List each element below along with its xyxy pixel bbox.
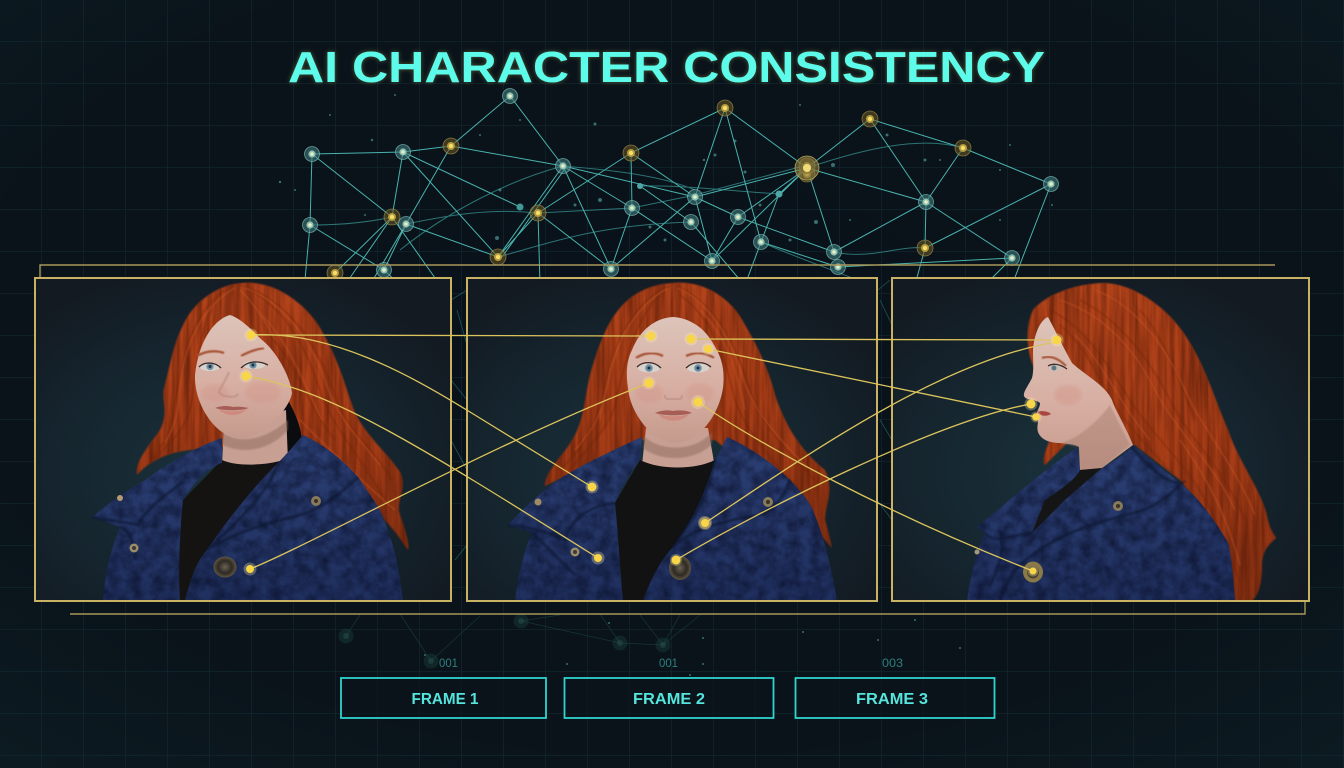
frame 1 border	[35, 278, 451, 601]
hair, frame 1	[137, 283, 408, 550]
coat folds and buttons, frame 2	[508, 460, 790, 580]
title: AI CHARACTER CONSISTENCY	[288, 43, 1045, 92]
face and neck, frame 1	[195, 315, 302, 478]
hair, frame 2	[545, 283, 832, 548]
tracking point markers	[240, 328, 1064, 576]
frame 2 sequence number: 001	[659, 656, 678, 670]
black sweater, frame 1	[179, 460, 280, 600]
navy coat, frame 3	[967, 445, 1235, 601]
frame 2 label button: FRAME 2	[633, 691, 705, 708]
outer offset gold frame lines	[40, 265, 1305, 614]
face and neck, frame 2	[627, 317, 724, 478]
navy coat, frame 2	[508, 437, 837, 601]
frame 3 label button	[796, 678, 994, 718]
panel: frame 1 portrait	[35, 278, 451, 601]
navy coat, frame 1	[93, 435, 403, 601]
frame 1 label button	[341, 678, 546, 718]
frame 2 border	[467, 278, 877, 601]
frame 3 sequence number: 003	[882, 656, 903, 670]
frame 2 label button	[564, 678, 774, 718]
tracking connector lines	[246, 335, 1057, 571]
coat folds and buttons, frame 1	[93, 463, 358, 578]
frame 1 label button: FRAME 1	[412, 691, 479, 708]
neural network graph	[279, 88, 1058, 676]
panel: frame 3 profile portrait	[892, 278, 1309, 601]
black sweater, frame 2	[615, 460, 720, 601]
hair, frame 3	[1028, 283, 1276, 601]
face and neck, frame 3	[1024, 317, 1133, 470]
coat folds and buttons, frame 3	[974, 447, 1182, 601]
panel: frame 2 portrait	[467, 278, 877, 601]
black sweater, frame 3	[1032, 468, 1102, 533]
frame 3 label button: FRAME 3	[856, 691, 928, 708]
frame 1 sequence number: 001	[439, 656, 458, 670]
frame 3 border	[892, 278, 1309, 601]
